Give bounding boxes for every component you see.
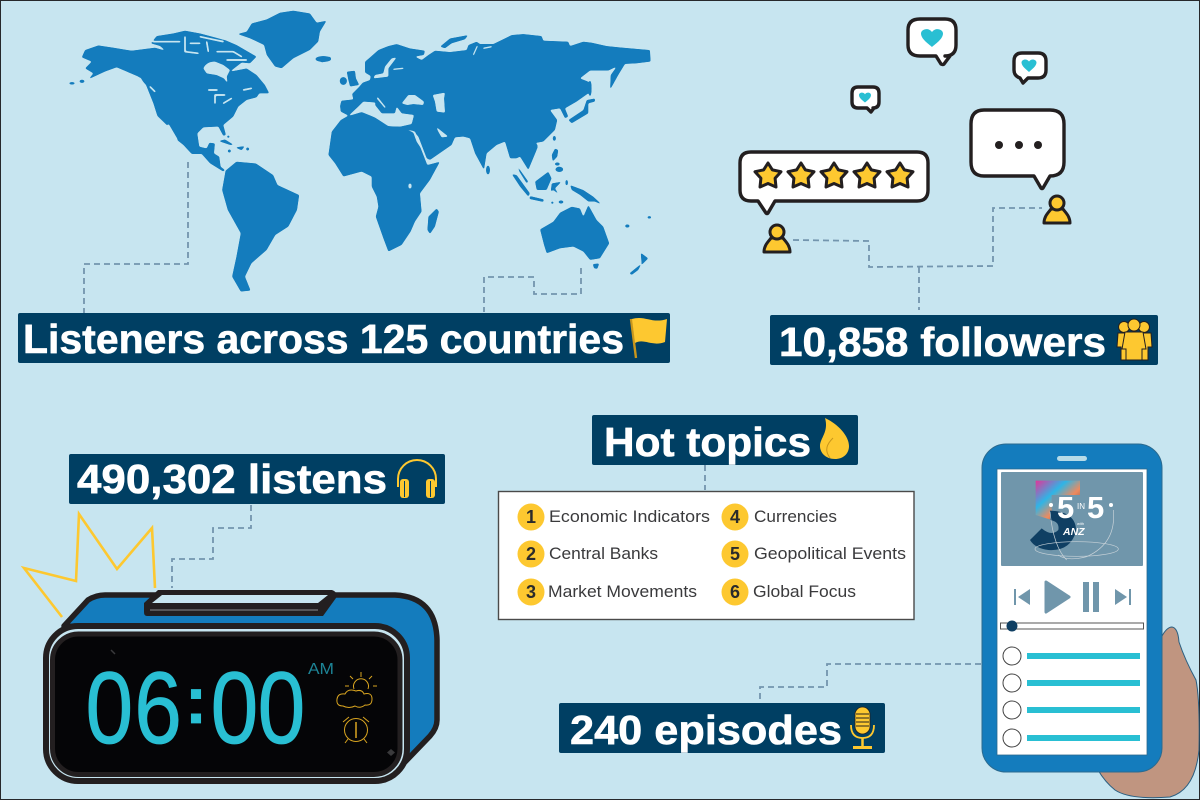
screen [997, 469, 1147, 755]
connector: listens banner to clock [172, 505, 251, 588]
connector: map to countries banner (Americas) [84, 162, 188, 313]
banner: listeners across 125 countries: Listeners across 125 countries [23, 316, 624, 362]
icon: microphone [851, 707, 874, 749]
topic 1 [518, 504, 710, 530]
topic 2: 2 [526, 544, 536, 564]
connector: people to followers banner [793, 208, 1042, 310]
phone body [982, 444, 1162, 772]
connector: phone to episodes banner [760, 664, 982, 699]
banner: hot topics [592, 415, 858, 465]
clock front [46, 626, 407, 781]
topic 3 [518, 578, 697, 606]
alarm clock [46, 590, 437, 781]
icon: skip forward [1115, 589, 1131, 605]
topic 1: Economic Indicators [549, 507, 710, 526]
icon: pause [1083, 582, 1099, 612]
topic 3: 3 [526, 582, 536, 602]
topic 4 [722, 504, 837, 530]
map: South America [222, 162, 299, 292]
banner: hot topics: Hot topics [604, 419, 811, 465]
icon: person left [764, 225, 790, 252]
icon: headphones [398, 460, 436, 498]
map: North America and Greenland [69, 11, 331, 172]
topic 5 [722, 540, 906, 568]
icon: alarm [343, 717, 369, 743]
topic 2: Central Banks [549, 544, 658, 563]
speech bubble: heart, small [852, 87, 879, 112]
AM label: AM [308, 661, 334, 678]
progress bar [1000, 620, 1144, 632]
icon: skip back [1014, 589, 1030, 605]
banner: followers: 10,858 followers [779, 319, 1106, 365]
topic 2 [518, 540, 658, 568]
podcast cover: 5 [1057, 490, 1074, 525]
speech bubble: typing dots [971, 110, 1064, 188]
podcast cover: with [1077, 521, 1084, 526]
alarm burst lines [24, 514, 155, 617]
world map [57, 7, 663, 298]
clock body [64, 595, 437, 762]
episode list [1003, 647, 1140, 747]
topic 4: 4 [730, 507, 740, 527]
podcast cover: 5 [1087, 490, 1104, 525]
speech bubble: five star rating [740, 152, 928, 214]
time readout: : [185, 663, 207, 737]
icon: flag [631, 318, 667, 358]
podcast cover [1001, 472, 1143, 566]
topic 6: Global Focus [753, 582, 856, 601]
topic 3: Market Movements [548, 582, 697, 601]
connector: hot topics to list [704, 465, 706, 490]
topic 4: Currencies [754, 507, 837, 526]
topic 1: 1 [526, 507, 536, 527]
hand holding phone [1098, 627, 1199, 798]
map: Eurasia, Africa and Oceania [320, 34, 651, 275]
banner: listens: 490,302 listens [77, 456, 387, 502]
icon: play [1046, 582, 1069, 612]
time readout: 0600 [86, 651, 305, 765]
banner: episodes: 240 episodes [570, 707, 842, 753]
topic 6: 6 [730, 582, 740, 602]
topic 5: 5 [730, 544, 740, 564]
connector: map to countries banner (Australia) [484, 268, 581, 312]
speech bubble: heart, medium [1014, 53, 1046, 83]
topic 5: Geopolitical Events [754, 544, 906, 563]
icon: flame [820, 418, 849, 459]
panel: topic list [498, 492, 914, 620]
phone [982, 444, 1162, 772]
icon: weather [337, 672, 377, 708]
podcast cover: ANZ [1062, 526, 1085, 538]
podcast cover: IN [1077, 502, 1085, 511]
speaker [1057, 456, 1087, 461]
icon: person right [1044, 196, 1070, 223]
icon: group of people [1117, 319, 1152, 360]
topic 6 [722, 578, 856, 606]
snooze button [144, 590, 336, 616]
speech bubble: heart, large [908, 19, 956, 64]
display [52, 634, 400, 774]
